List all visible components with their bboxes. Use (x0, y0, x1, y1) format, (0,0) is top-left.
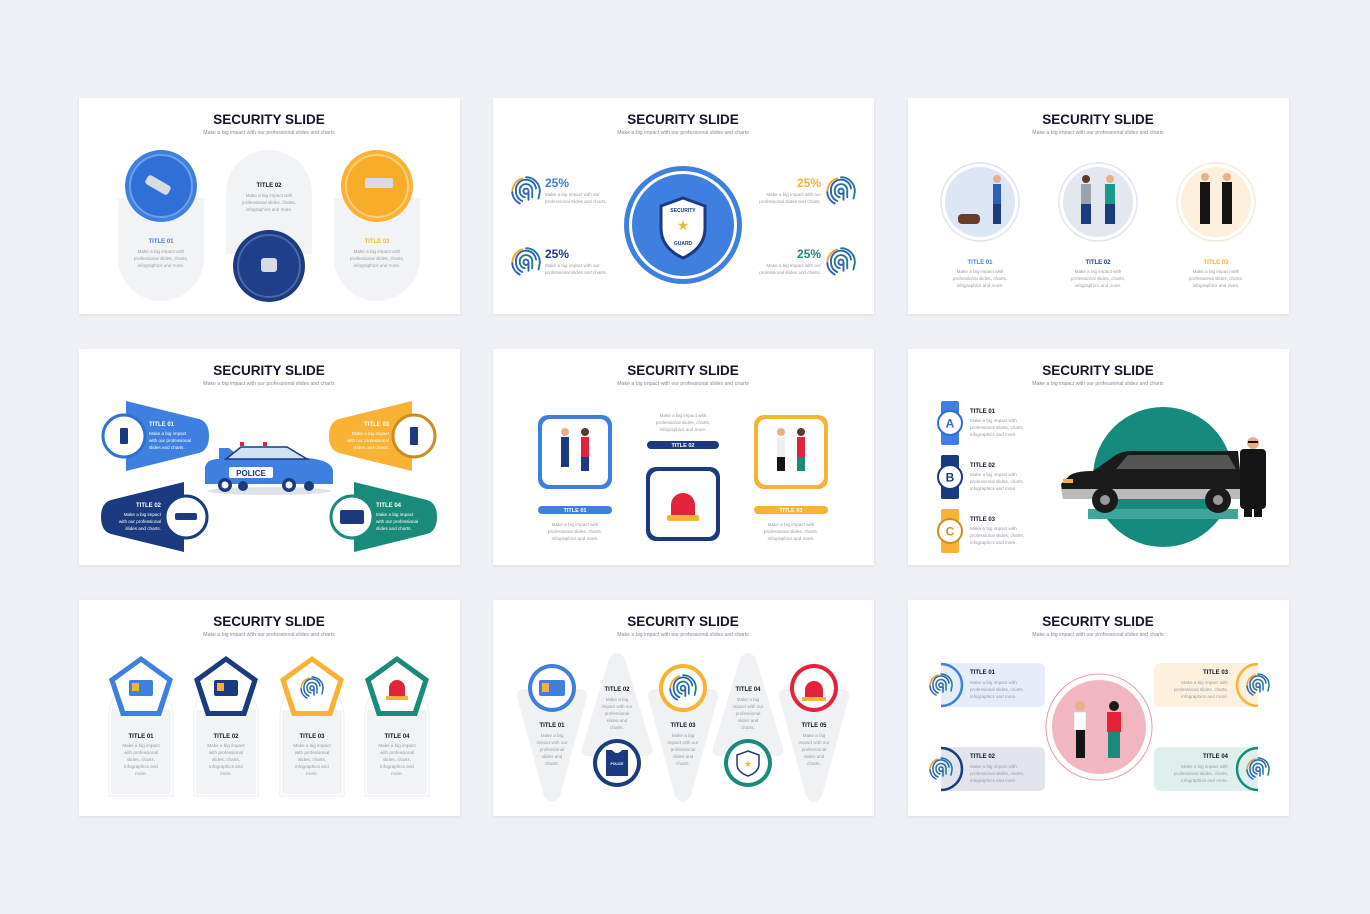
item: title 01: infographics and more. (957, 283, 1003, 288)
item: title 03: infographics and (295, 764, 329, 769)
box: title 02 (930, 747, 1045, 791)
box: title 03 (1154, 663, 1269, 707)
illustration: police car (205, 442, 333, 495)
panel: title 03: infographics and more. (354, 263, 400, 268)
panel: title 03: TITLE 03 (364, 239, 390, 245)
item: title 04: Make a big impact (378, 743, 416, 748)
item B: professional slides, charts, (970, 479, 1024, 484)
box: title 04: Make a big impact with (1181, 764, 1228, 769)
box: title 04: TITLE 04 (1203, 754, 1229, 760)
item: title 04: TITLE 04 (735, 687, 761, 693)
panel: title 02: infographics and more. (246, 207, 292, 212)
item: title 03: TITLE 03 (1203, 260, 1229, 266)
box: title 01: infographics and more. (970, 694, 1017, 699)
heading (1032, 614, 1164, 638)
item: title 02: professional (605, 711, 629, 716)
box: title 03: TITLE 03 (1203, 670, 1229, 676)
item: title 02: more. (220, 771, 232, 776)
slide 5: square icons (493, 349, 874, 565)
illustration: car with guard (1061, 407, 1266, 547)
heading (203, 112, 335, 136)
callout: title 02 (101, 482, 207, 552)
heading: Make a big impact with our professional slides and charts (1032, 130, 1164, 136)
illustration: center circle (1046, 674, 1152, 780)
callout: title 02: TITLE 02 (136, 503, 162, 509)
item: title 02: POLICE (610, 762, 624, 766)
item: title 03: TITLE 03 (780, 508, 802, 514)
panel: title 03: professional slides, charts, (350, 256, 404, 261)
badge: GUARD (674, 241, 693, 247)
item: title 03: Make a big impact with (768, 522, 815, 527)
item: title 02: Make a big impact with (660, 413, 707, 418)
item: title 02 (646, 413, 720, 541)
slide 2: guard badge (493, 98, 874, 314)
item: title 04 (365, 656, 429, 796)
panel: title 02 (226, 150, 312, 302)
item: title 03: Make a big impact with (1193, 269, 1240, 274)
stat: bottom left: Make a big impact with our (545, 263, 600, 268)
slide 9: center people with fingerprint boxes (908, 600, 1289, 816)
box: title 02: professional slides, charts, (970, 771, 1024, 776)
stat: top right (759, 176, 855, 204)
item: title 01: slides, charts, (127, 757, 155, 762)
item: title 02: professional slides, charts, (656, 420, 710, 425)
stat: top right: 25% (797, 176, 821, 190)
box: title 04: professional slides, charts, (1174, 771, 1228, 776)
item: title 01: professional slides, charts, (953, 276, 1007, 281)
slide 7: pentagons (79, 600, 460, 816)
stat: bottom right: 25% (797, 247, 821, 261)
heading (1032, 363, 1164, 387)
callout: title 03: Make a big impact (352, 431, 390, 436)
item: title 03 (648, 664, 718, 802)
item: title 01 (109, 656, 173, 796)
item: title 03: with professional (295, 750, 329, 755)
panel: title 01 (118, 150, 204, 301)
heading: Make a big impact with our professional slides and charts (617, 632, 749, 638)
item: title 02: Make a big impact with (1075, 269, 1122, 274)
item: title 02: with professional (209, 750, 243, 755)
item: title 05: TITLE 05 (801, 723, 827, 729)
item: title 02 (1059, 163, 1137, 288)
item: title 04: Make a big (737, 697, 760, 702)
box: title 04 (1154, 747, 1269, 791)
heading: SECURITY SLIDE (1042, 112, 1154, 127)
item: title 02: slides, charts, (212, 757, 240, 762)
item: title 04: infographics and (380, 764, 414, 769)
item: title 03: Make a big (672, 733, 695, 738)
heading: Make a big impact with our professional slides and charts (617, 381, 749, 387)
item: title 01: impact with our (537, 740, 568, 745)
item: title 01: infographics and more. (552, 536, 598, 541)
stat: top left: professional slides and charts. (545, 199, 607, 204)
panel: title 03 (334, 150, 420, 301)
item: title 02: slides and (607, 718, 628, 723)
callout: title 01: TITLE 01 (149, 422, 175, 428)
item: title 05: charts. (807, 761, 821, 766)
item: title 01: more. (135, 771, 147, 776)
panel: title 01: infographics and more. (138, 263, 184, 268)
callout: title 03: slides and charts. (353, 445, 389, 450)
item: title 04: professional (736, 711, 760, 716)
heading: Make a big impact with our professional slides and charts (203, 130, 335, 136)
item C: Make a big impact with (970, 526, 1017, 531)
callout: title 02: with our professional (119, 519, 161, 524)
heading: Make a big impact with our professional slides and charts (617, 130, 749, 136)
item B: Make a big impact with (970, 472, 1017, 477)
item: title 04: more. (391, 771, 403, 776)
item: title 05: slides and (804, 754, 825, 759)
heading: SECURITY SLIDE (1042, 363, 1154, 378)
stat: top left: Make a big impact with our (545, 192, 600, 197)
item B (938, 455, 1024, 499)
box: title 02: infographics and more. (970, 778, 1017, 783)
item: title 03: infographics and more. (1193, 283, 1239, 288)
heading: SECURITY SLIDE (213, 112, 325, 127)
item: title 01 (941, 163, 1019, 288)
item: title 02: TITLE 02 (672, 443, 694, 449)
stat: bottom left: professional slides and charts. (545, 270, 607, 275)
item: title 01: Make a big impact with (552, 522, 599, 527)
callout: title 04: with our professional (376, 519, 418, 524)
stat: top left: 25% (545, 176, 569, 190)
box: title 01: TITLE 01 (970, 670, 996, 676)
callout: title 02: Make a big impact (124, 512, 162, 517)
item: title 03: infographics and more. (768, 536, 814, 541)
callout: title 01: with our professional (149, 438, 191, 443)
item: title 02: infographics and more. (660, 427, 706, 432)
stat: bottom left (512, 247, 607, 275)
heading (617, 363, 749, 387)
callout: title 04: slides and charts. (376, 526, 412, 531)
heading: SECURITY SLIDE (627, 363, 739, 378)
item: title 01: TITLE 01 (967, 260, 993, 266)
item: title 02 (582, 653, 652, 787)
callout: title 04: TITLE 04 (376, 503, 402, 509)
callout: title 04 (331, 482, 437, 552)
item: title 02: professional slides, charts, (1071, 276, 1125, 281)
box: title 01: professional slides, charts, (970, 687, 1024, 692)
heading: Make a big impact with our professional slides and charts (1032, 381, 1164, 387)
item: title 04: slides, charts, (383, 757, 411, 762)
item: title 03 (754, 415, 828, 541)
item: title 03: slides and (673, 754, 694, 759)
box: title 03: infographics and more. (1181, 694, 1228, 699)
badge (624, 166, 742, 284)
item B: B (946, 470, 955, 484)
item: title 03: professional (671, 747, 695, 752)
heading: Make a big impact with our professional slides and charts (203, 381, 335, 387)
stat: top left (512, 176, 607, 204)
stat: bottom left: 25% (545, 247, 569, 261)
panel: title 03: Make a big impact with (354, 249, 401, 254)
heading: Make a big impact with our professional slides and charts (1032, 632, 1164, 638)
slide 3: people circles (908, 98, 1289, 314)
item: title 04: TITLE 04 (384, 734, 410, 740)
item: title 01: charts. (545, 761, 559, 766)
item: title 04: with professional (380, 750, 414, 755)
item: title 05: Make a big (803, 733, 826, 738)
callout: title 01: Make a big impact (149, 431, 187, 436)
item B: infographics and more. (970, 486, 1017, 491)
item: title 01: Make a big (541, 733, 564, 738)
item: title 03: TITLE 03 (299, 734, 325, 740)
callout: title 01: slides and charts. (149, 445, 185, 450)
item: title 02: TITLE 02 (213, 734, 239, 740)
item: title 02: TITLE 02 (604, 687, 630, 693)
item A: Make a big impact with (970, 418, 1017, 423)
box: title 01 (930, 663, 1045, 707)
item: title 03: professional slides, charts, (1189, 276, 1243, 281)
item: title 04 (713, 653, 783, 787)
panel: title 02: Make a big impact with (246, 193, 293, 198)
callout: title 04: Make a big impact (376, 512, 414, 517)
stat: top right: Make a big impact with our (766, 192, 821, 197)
item: title 02: infographics and more. (1075, 283, 1121, 288)
slide 4: police car (79, 349, 460, 565)
illustration: police car: POLICE (236, 469, 267, 478)
item: title 01: professional (540, 747, 564, 752)
item: title 01 (538, 415, 612, 541)
item: title 03 (1177, 163, 1255, 288)
heading (617, 614, 749, 638)
item: title 03: impact with our (668, 740, 699, 745)
heading: SECURITY SLIDE (213, 363, 325, 378)
heading (203, 614, 335, 638)
panel: title 02: TITLE 02 (256, 183, 282, 189)
item: title 01 (517, 664, 587, 802)
item: title 01: Make a big impact (122, 743, 160, 748)
slide 6: limousine (908, 349, 1289, 565)
item: title 02: impact with our (602, 704, 633, 709)
item: title 03: Make a big impact (293, 743, 331, 748)
item: title 01: Make a big impact with (957, 269, 1004, 274)
item: title 04: impact with our (733, 704, 764, 709)
item C: professional slides, charts, (970, 533, 1024, 538)
panel: title 02: professional slides, charts, (242, 200, 296, 205)
item A: professional slides, charts, (970, 425, 1024, 430)
item: title 03: charts. (676, 761, 690, 766)
item: title 02: TITLE 02 (1085, 260, 1111, 266)
heading: SECURITY SLIDE (627, 112, 739, 127)
item C: infographics and more. (970, 540, 1017, 545)
heading (617, 112, 749, 136)
heading: SECURITY SLIDE (1042, 614, 1154, 629)
item A: infographics and more. (970, 432, 1017, 437)
heading: SECURITY SLIDE (213, 614, 325, 629)
item C: C (946, 524, 955, 538)
box: title 01: Make a big impact with (970, 680, 1017, 685)
badge: ★ (677, 217, 689, 233)
slide 1: camera circles (79, 98, 460, 314)
item: title 01: with professional (124, 750, 158, 755)
box: title 02: Make a big impact with (970, 764, 1017, 769)
item: title 02: charts. (610, 725, 624, 730)
item A: TITLE 01 (970, 409, 996, 415)
item: title 04: ★ (744, 759, 752, 769)
box: title 04: infographics and more. (1181, 778, 1228, 783)
item: title 02: Make a big impact (207, 743, 245, 748)
stat: top right: professional slides and charts. (759, 199, 821, 204)
heading (1032, 112, 1164, 136)
item A (938, 401, 1024, 445)
item A: A (946, 416, 955, 430)
item: title 03: professional slides, charts, (764, 529, 818, 534)
callout: title 03 (329, 401, 435, 471)
panel: title 01: TITLE 01 (148, 239, 174, 245)
box: title 03: professional slides, charts, (1174, 687, 1228, 692)
item: title 05: professional (802, 747, 826, 752)
stat: bottom right: Make a big impact with our (766, 263, 821, 268)
box: title 02: TITLE 02 (970, 754, 996, 760)
heading (203, 363, 335, 387)
item: title 04: charts. (741, 725, 755, 730)
item C: TITLE 03 (970, 517, 996, 523)
heading: SECURITY SLIDE (627, 614, 739, 629)
item: title 03 (280, 656, 344, 796)
item: title 01: TITLE 01 (539, 723, 565, 729)
item: title 03: more. (306, 771, 318, 776)
item: title 01: TITLE 01 (564, 508, 586, 514)
callout: title 02: slides and charts. (125, 526, 161, 531)
panel: title 01: professional slides, charts, (134, 256, 188, 261)
stat: bottom right (759, 247, 855, 275)
item: title 01: TITLE 01 (128, 734, 154, 740)
panel: title 01: Make a big impact with (138, 249, 185, 254)
item: title 05 (779, 664, 849, 802)
heading: Make a big impact with our professional slides and charts (203, 632, 335, 638)
stat: bottom right: professional slides and charts. (759, 270, 821, 275)
item: title 01: infographics and (124, 764, 158, 769)
box: title 03: Make a big impact with (1181, 680, 1228, 685)
item B: TITLE 02 (970, 463, 996, 469)
callout: title 03: TITLE 03 (364, 422, 390, 428)
item: title 02: Make a big (606, 697, 629, 702)
item: title 01: professional slides, charts, (548, 529, 602, 534)
item: title 05: impact with our (799, 740, 830, 745)
item C (938, 509, 1024, 553)
item: title 03: slides, charts, (298, 757, 326, 762)
callout: title 03: with our professional (347, 438, 389, 443)
badge: SECURITY (670, 208, 696, 214)
slide 8: five lozenges (493, 600, 874, 816)
item: title 02: infographics and (209, 764, 243, 769)
item: title 01: slides and (542, 754, 563, 759)
item: title 02 (194, 656, 258, 796)
item: title 04: slides and (738, 718, 759, 723)
callout: title 01 (103, 401, 209, 471)
item: title 03: TITLE 03 (670, 723, 696, 729)
